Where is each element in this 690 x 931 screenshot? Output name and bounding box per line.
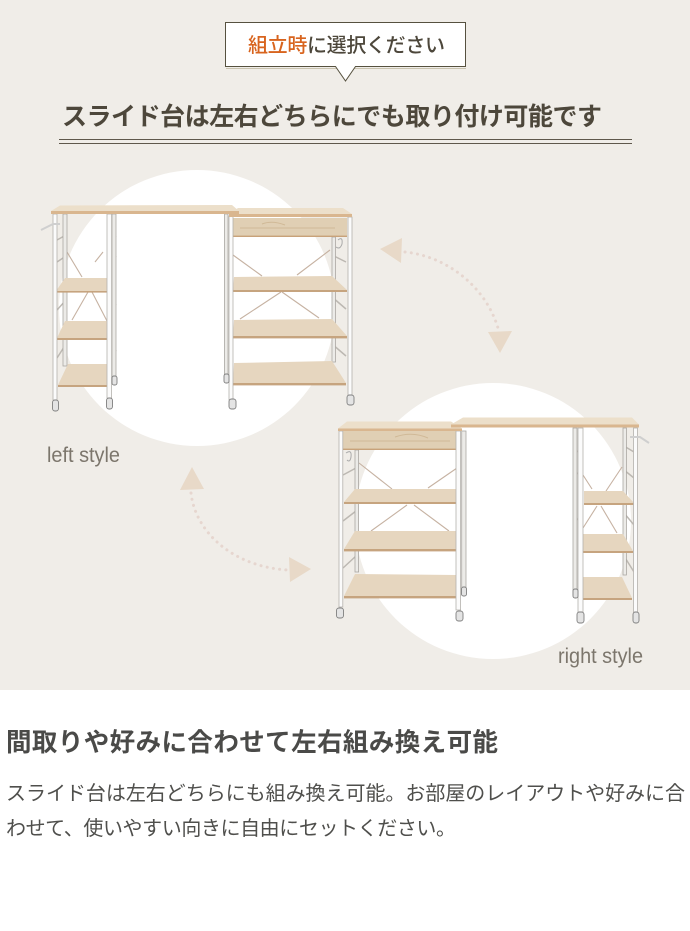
casters <box>336 587 639 623</box>
shelves: wide unit <box>344 489 457 598</box>
front posts <box>53 214 352 400</box>
tabletops <box>338 418 639 431</box>
callout: choose when assembling <box>226 22 466 81</box>
white circle: left style backdrop <box>59 170 335 446</box>
rear posts <box>63 214 336 378</box>
shelves: left unit <box>56 278 108 387</box>
side hook <box>336 239 342 248</box>
arrow: upper double-headed curve <box>380 238 512 353</box>
arrow: lower double-headed curve <box>180 467 311 582</box>
side hook <box>346 452 351 461</box>
hook <box>630 437 649 443</box>
shelves: right unit <box>233 276 347 385</box>
heading double rule <box>59 139 632 144</box>
label: left style: left style <box>47 444 120 467</box>
body text <box>6 782 685 840</box>
drawer <box>233 218 347 237</box>
furniture: left style rack <box>41 205 354 411</box>
shelves: narrow unit <box>583 491 634 600</box>
furniture: right style rack <box>336 418 649 623</box>
white circle: right style backdrop <box>355 383 631 659</box>
body text: スライド台は左右どちらにも組み換え可能。お部屋のレイアウトや好みに合 <box>6 782 685 805</box>
drawer <box>343 431 457 450</box>
section heading: 間取りや好みに合わせて左右組み換え可能 <box>6 729 498 757</box>
main heading: スライド台は左右どちらにでも取り付け可能です <box>62 103 602 131</box>
hook <box>41 224 60 230</box>
front posts <box>339 428 638 612</box>
callout: choose when assembling: 組立時に選択ください <box>248 34 445 57</box>
rear posts <box>355 428 626 595</box>
label: right style: right style <box>558 645 643 668</box>
body text: わせて、使いやすい向きに自由にセットください。 <box>6 817 456 840</box>
casters <box>52 374 354 411</box>
tabletops <box>51 205 352 217</box>
